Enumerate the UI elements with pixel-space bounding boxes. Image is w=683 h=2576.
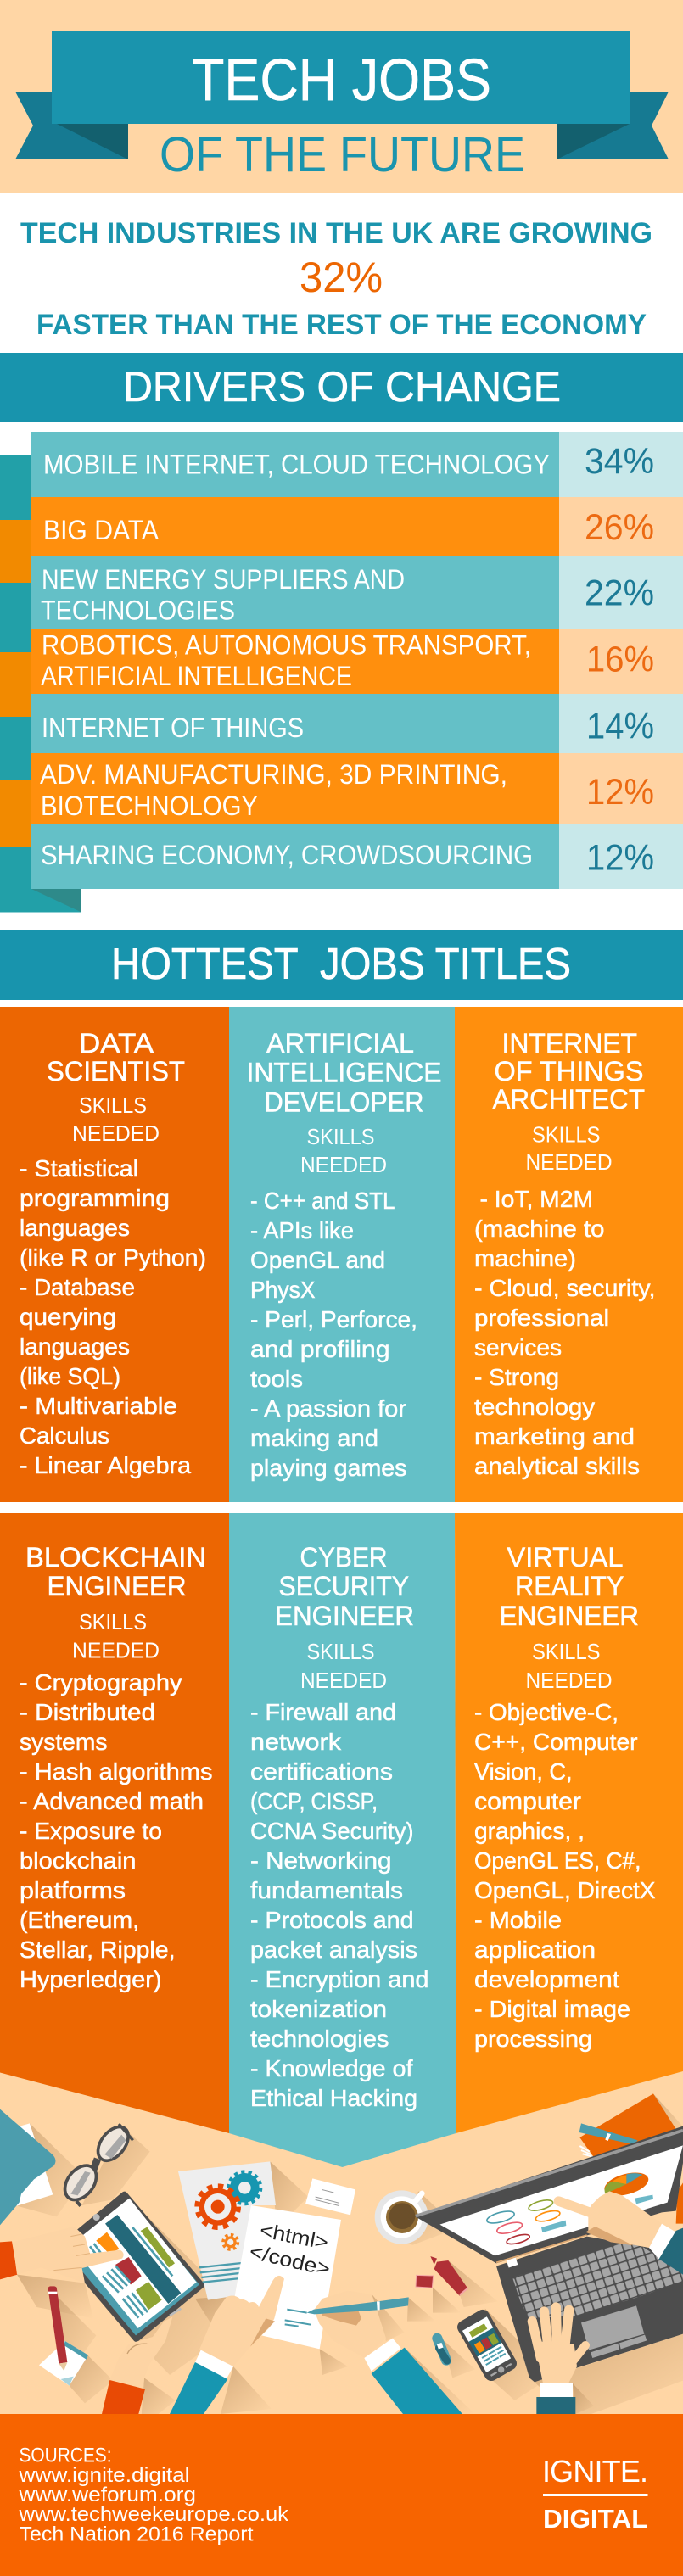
panel: virtual reality engineer: OpenGL, DirectX	[474, 1877, 656, 1903]
panel: internet of things architect: services	[474, 1334, 562, 1361]
row: mobile internet 34%: MOBILE INTERNET, CLOUD TECHNOLOGY	[43, 450, 550, 480]
shadows	[372, 2093, 683, 2420]
panel: blockchain engineer: BLOCKCHAIN	[25, 1542, 206, 1573]
panel: cyber security engineer: - Networking	[250, 1847, 392, 1874]
growth statement	[20, 217, 652, 341]
icon: coffee cup	[375, 2190, 428, 2244]
row: manufacturing 12%: 12%	[586, 772, 654, 813]
panel: cyber security engineer: SECURITY	[278, 1571, 409, 1601]
row: new energy 22%: TECHNOLOGIES	[41, 595, 235, 626]
panel: virtual reality engineer: graphics, ,	[474, 1818, 585, 1844]
panel: artificial intelligence developer: INTELLIGENCE	[246, 1057, 441, 1087]
panel: data scientist: SKILLS	[79, 1092, 147, 1118]
pie chart	[602, 2169, 651, 2199]
logo: ignite digital: DIGITAL	[543, 2504, 648, 2534]
panel: internet of things architect: technology	[474, 1394, 595, 1420]
ribbon banner	[15, 31, 669, 159]
row: sharing economy 12%	[31, 824, 683, 889]
sources: www.ignite.digital	[18, 2464, 189, 2487]
panel: data scientist: - Multivariable	[20, 1393, 177, 1419]
panel: blockchain engineer: (Ethereum,	[20, 1907, 139, 1933]
panel: data scientist: (like R or Python)	[20, 1244, 206, 1271]
panel: data scientist: - Database	[20, 1274, 135, 1300]
panel: virtual reality engineer: SKILLS	[532, 1639, 601, 1664]
panel: cyber security engineer: fundamentals	[250, 1877, 403, 1903]
sources	[18, 2445, 289, 2546]
panel: cyber security engineer	[229, 1513, 456, 2167]
panel: artificial intelligence developer: and profiling	[250, 1336, 390, 1362]
panel: artificial intelligence developer: ARTIFICIAL	[266, 1028, 414, 1059]
row: sharing economy 12%: SHARING ECONOMY, CROWDSOURCING	[41, 840, 533, 870]
sources: Tech Nation 2016 Report	[19, 2523, 254, 2546]
panel: cyber security engineer: - Knowledge of	[250, 2055, 413, 2081]
panel: blockchain engineer: blockchain	[20, 1847, 136, 1874]
panel: cyber security engineer: NEEDED	[300, 1668, 387, 1693]
panel: blockchain engineer: - Distributed	[20, 1699, 155, 1725]
panel: blockchain engineer: platforms	[20, 1877, 126, 1903]
panel: cyber security engineer: ENGINEER	[275, 1601, 414, 1631]
panel: virtual reality engineer: NEEDED	[526, 1668, 613, 1693]
heading: hottest jobs titles: HOTTEST JOBS TITLES	[111, 940, 571, 989]
panel: blockchain engineer	[0, 1513, 229, 2133]
row: mobile internet 34%: 34%	[585, 441, 654, 482]
document with code text: </code>	[247, 2240, 333, 2281]
panel: virtual reality engineer: C++, Computer	[474, 1729, 638, 1755]
row: mobile internet 34%	[31, 432, 683, 497]
panel: internet of things architect: analytical skills	[474, 1453, 640, 1479]
panel: internet of things architect: - IoT, M2M	[480, 1186, 593, 1212]
logo: ignite digital	[542, 2454, 648, 2534]
panel: artificial intelligence developer: - C++ and STL	[250, 1187, 395, 1214]
panel: internet of things architect: - Strong	[474, 1364, 559, 1390]
panel: data scientist: programming	[20, 1185, 170, 1211]
business card	[305, 2178, 355, 2215]
panel: artificial intelligence developer: OpenGL and	[250, 1247, 385, 1273]
panel: virtual reality engineer: - Mobile	[474, 1907, 562, 1933]
heading: drivers of change: DRIVERS OF CHANGE	[123, 363, 561, 411]
panel: internet of things architect: professional	[474, 1305, 609, 1331]
panel: internet of things architect	[455, 1007, 683, 1502]
panel: cyber security engineer: technologies	[250, 2026, 389, 2052]
panel: data scientist: querying	[20, 1304, 116, 1330]
panel: cyber security engineer: - Encryption and	[250, 1966, 429, 1992]
row: manufacturing 12%: BIOTECHNOLOGY	[41, 791, 258, 821]
panel: data scientist: DATA	[79, 1028, 154, 1059]
panel: artificial intelligence developer: PhysX	[250, 1277, 316, 1303]
panel: virtual reality engineer: computer	[474, 1788, 581, 1814]
panel: internet of things architect: marketing and	[474, 1423, 635, 1450]
panel: virtual reality engineer: ENGINEER	[499, 1601, 639, 1631]
icon: folder with paper	[0, 2109, 55, 2225]
logo: ignite digital: IGNITE.	[542, 2454, 648, 2489]
panel: cyber security engineer: - Firewall and	[250, 1699, 396, 1725]
icon: notebook and pen	[579, 2093, 683, 2224]
panel: artificial intelligence developer: - APIs like	[250, 1217, 354, 1243]
panel: artificial intelligence developer	[229, 1007, 455, 1502]
icon: hand writing with pen	[307, 2291, 462, 2414]
panel: drivers table	[0, 432, 683, 913]
panel: artificial intelligence developer: NEEDED	[300, 1152, 387, 1177]
panel: blockchain engineer: Stellar, Ripple,	[20, 1936, 175, 1963]
panel: virtual reality engineer: VIRTUAL	[507, 1542, 623, 1573]
panel: artificial intelligence developer: tools	[250, 1366, 303, 1392]
panel: virtual reality engineer: development	[474, 1966, 619, 1992]
panel: internet of things architect: INTERNET	[502, 1028, 637, 1059]
row: manufacturing 12%: ADV. MANUFACTURING, 3D PRINTING,	[40, 759, 507, 790]
icon: laptop	[414, 2126, 683, 2382]
panel: virtual reality engineer: application	[474, 1936, 596, 1963]
row: manufacturing 12%	[31, 753, 683, 824]
panel: cyber security engineer: network	[250, 1729, 342, 1755]
document with code text	[235, 2205, 341, 2349]
document with code text: <html>	[258, 2219, 330, 2255]
row: new energy 22%	[31, 556, 683, 629]
row: sharing economy 12%: 12%	[586, 838, 654, 879]
panel: blockchain engineer: SKILLS	[79, 1609, 147, 1634]
panel: artificial intelligence developer: - Perl, Perforce,	[250, 1306, 417, 1333]
panel: data scientist: languages	[20, 1333, 130, 1360]
panel: cyber security engineer: certifications	[250, 1758, 393, 1785]
panel: internet of things architect: NEEDED	[526, 1149, 613, 1175]
header panel	[0, 0, 683, 193]
panel: data scientist: languages	[20, 1215, 130, 1241]
icon: smartphone	[455, 2307, 519, 2383]
icon: tablet	[59, 2194, 201, 2339]
panel: cyber security engineer: SKILLS	[307, 1639, 375, 1664]
row: robotics 16%: ARTIFICIAL INTELLIGENCE	[41, 661, 352, 691]
panel: virtual reality engineer: - Objective-C,	[474, 1699, 619, 1725]
panel: data scientist: NEEDED	[72, 1120, 160, 1146]
illustration: desk left side	[0, 2109, 355, 2414]
illustration: desk right side	[307, 2093, 683, 2420]
row: new energy 22%: NEW ENERGY SUPPLIERS AND	[42, 564, 405, 595]
panel: virtual reality engineer: processing	[474, 2026, 592, 2052]
panel: data scientist: SCIENTIST	[47, 1056, 185, 1087]
panel: data scientist: (like SQL)	[20, 1363, 120, 1389]
panel: virtual reality engineer: OpenGL ES, C#,	[474, 1847, 641, 1874]
panel: cyber security engineer: Ethical Hacking	[250, 2085, 417, 2111]
row: big data 26%	[31, 497, 683, 556]
icon: marker and cap	[416, 2256, 468, 2296]
panel: blockchain engineer: ENGINEER	[48, 1571, 187, 1601]
panel: virtual reality engineer: - Digital image	[474, 1996, 630, 2022]
growth statement: TECH INDUSTRIES IN THE UK ARE GROWING	[20, 217, 652, 249]
sources: SOURCES:	[19, 2445, 112, 2467]
panel: internet of things architect: - Cloud, security,	[474, 1275, 655, 1301]
panel: data scientist: - Linear Algebra	[20, 1452, 191, 1478]
panel: blockchain engineer: systems	[20, 1729, 108, 1755]
icon: glasses	[59, 2121, 134, 2206]
panel: artificial intelligence developer: - A passion for	[250, 1395, 406, 1422]
panel: artificial intelligence developer: DEVELOPER	[265, 1087, 424, 1118]
panel: artificial intelligence developer: playing games	[250, 1455, 407, 1481]
icon: hand on laptop	[558, 2191, 683, 2275]
panel: cyber security engineer: tokenization	[250, 1996, 387, 2022]
growth statement: FASTER THAN THE REST OF THE ECONOMY	[36, 309, 647, 341]
row: robotics 16%	[31, 629, 683, 694]
row: internet of things 14%: INTERNET OF THINGS	[42, 712, 304, 743]
row: big data 26%: BIG DATA	[43, 515, 160, 545]
back ribbon	[0, 455, 81, 913]
panel: artificial intelligence developer: making and	[250, 1425, 378, 1451]
panel: internet of things architect: SKILLS	[532, 1121, 601, 1147]
panel: internet of things architect: (machine to	[474, 1215, 604, 1242]
shadows	[17, 2123, 348, 2414]
title: TECH JOBS	[192, 47, 491, 113]
illustration background	[0, 2061, 683, 2417]
row: robotics 16%: ROBOTICS, AUTONOMOUS TRANSPORT,	[42, 629, 531, 660]
heading: hottest jobs titles	[0, 930, 683, 1000]
row: internet of things 14%: 14%	[586, 706, 654, 746]
growth statement: 32%	[300, 254, 383, 301]
icon: hand on tablet	[0, 2227, 124, 2283]
panel: internet of things architect: OF THINGS	[494, 1056, 643, 1087]
panel: cyber security engineer: (CCP, CISSP,	[250, 1788, 378, 1814]
icon: pointing hand	[170, 2276, 284, 2414]
sources: www.techweekeurope.co.uk	[18, 2503, 289, 2526]
panel: internet of things architect: machine)	[474, 1245, 576, 1271]
panel: internet of things architect: ARCHITECT	[492, 1084, 645, 1115]
panel: data scientist	[0, 1007, 229, 1502]
panel: blockchain engineer: - Cryptography	[20, 1669, 182, 1696]
panel: artificial intelligence developer: SKILLS	[307, 1124, 375, 1149]
row: robotics 16%: 16%	[586, 640, 654, 680]
icon: hand on keyboard	[532, 2307, 585, 2415]
sources: www.weforum.org	[18, 2484, 196, 2506]
icon: hand under tablet	[102, 2317, 172, 2414]
panel: cyber security engineer: packet analysis	[250, 1936, 417, 1963]
panel: blockchain engineer: NEEDED	[72, 1637, 160, 1662]
panel: data scientist: - Statistical	[20, 1155, 138, 1182]
panel: blockchain engineer: - Advanced math	[20, 1788, 204, 1814]
panel: cyber security engineer: - Protocols and	[250, 1907, 414, 1933]
panel: virtual reality engineer: REALITY	[515, 1571, 624, 1601]
screen icons	[485, 2198, 561, 2246]
panel: cyber security engineer: CYBER	[300, 1542, 387, 1573]
panel: blockchain engineer: - Exposure to	[20, 1818, 162, 1844]
panel: virtual reality engineer: Vision, C,	[474, 1758, 572, 1785]
icon: usb stick	[437, 2339, 447, 2361]
row: internet of things 14%	[31, 694, 683, 753]
subtitle: OF THE FUTURE	[160, 127, 525, 182]
panel: blockchain engineer: - Hash algorithms	[20, 1758, 212, 1785]
row: new energy 22%: 22%	[585, 573, 654, 614]
icon: pencil on note	[39, 2286, 88, 2386]
row: big data 26%: 26%	[585, 507, 654, 548]
panel: cyber security engineer: CCNA Security)	[250, 1818, 414, 1844]
footer panel	[0, 2414, 683, 2576]
panel: virtual reality engineer	[455, 1513, 683, 2133]
heading: drivers of change	[0, 353, 683, 422]
panel: data scientist: Calculus	[20, 1422, 109, 1449]
document with gears	[178, 2161, 276, 2300]
panel: blockchain engineer: Hyperledger)	[20, 1966, 161, 1992]
